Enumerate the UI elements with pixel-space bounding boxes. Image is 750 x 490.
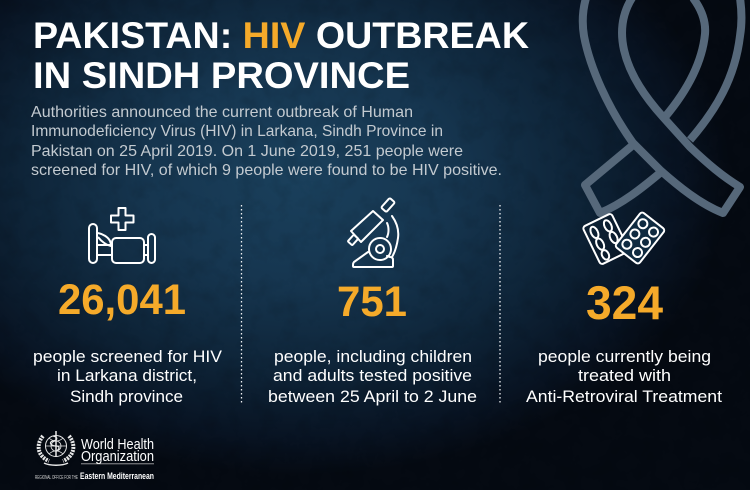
stat: people screened: in Larkana district,	[57, 366, 197, 385]
regional office line	[35, 471, 154, 481]
organization name: Organization	[81, 449, 154, 465]
intro paragraph: Pakistan on 25 April 2019. On 1 June 2019, 251 people were	[31, 143, 463, 160]
stat: on treatment	[526, 276, 722, 406]
stat: people screened: 26,041	[58, 276, 186, 324]
stat: tested positive	[268, 278, 477, 406]
stat: on treatment: Anti-Retroviral Treatment	[526, 387, 722, 406]
stat: on treatment: treated with	[578, 366, 671, 385]
WHO logo	[35, 431, 154, 481]
stat: people screened: people screened for HIV	[33, 347, 223, 366]
icon: pill blister packs	[582, 211, 665, 265]
intro paragraph: Immunodeficiency Virus (HIV) in Larkana, Sindh Province in	[31, 123, 443, 140]
intro paragraph	[31, 104, 502, 179]
intro paragraph: screened for HIV, of which 9 people were found to be HIV positive.	[31, 162, 502, 179]
organization name	[81, 437, 154, 465]
stat: people screened	[33, 276, 223, 406]
stat: tested positive: and adults tested positive	[273, 366, 472, 385]
awareness ribbon	[583, 0, 742, 213]
icon: microscope	[348, 198, 398, 267]
title: PAKISTAN: HIV OUTBREAK	[33, 14, 529, 56]
regional office line: Eastern Mediterranean	[80, 471, 154, 481]
title: IN SINDH PROVINCE	[33, 54, 410, 96]
intro paragraph: Authorities announced the current outbreak of Human	[31, 104, 413, 121]
stat: tested positive: between 25 April to 2 June	[268, 387, 477, 406]
icon: hospital bed	[89, 208, 155, 263]
stat: people screened: Sindh province	[70, 387, 183, 406]
dotted dividers	[242, 205, 500, 405]
regional office line: REGIONAL OFFICE FOR THE	[35, 475, 78, 481]
organization name: World Health	[81, 437, 154, 453]
stat: tested positive: 751	[337, 278, 407, 326]
stat: tested positive: people, including children	[274, 347, 472, 366]
icon: WHO emblem	[39, 431, 73, 465]
stat: on treatment: people currently being	[538, 347, 711, 366]
stat: on treatment: 324	[586, 276, 663, 329]
title	[33, 14, 529, 96]
